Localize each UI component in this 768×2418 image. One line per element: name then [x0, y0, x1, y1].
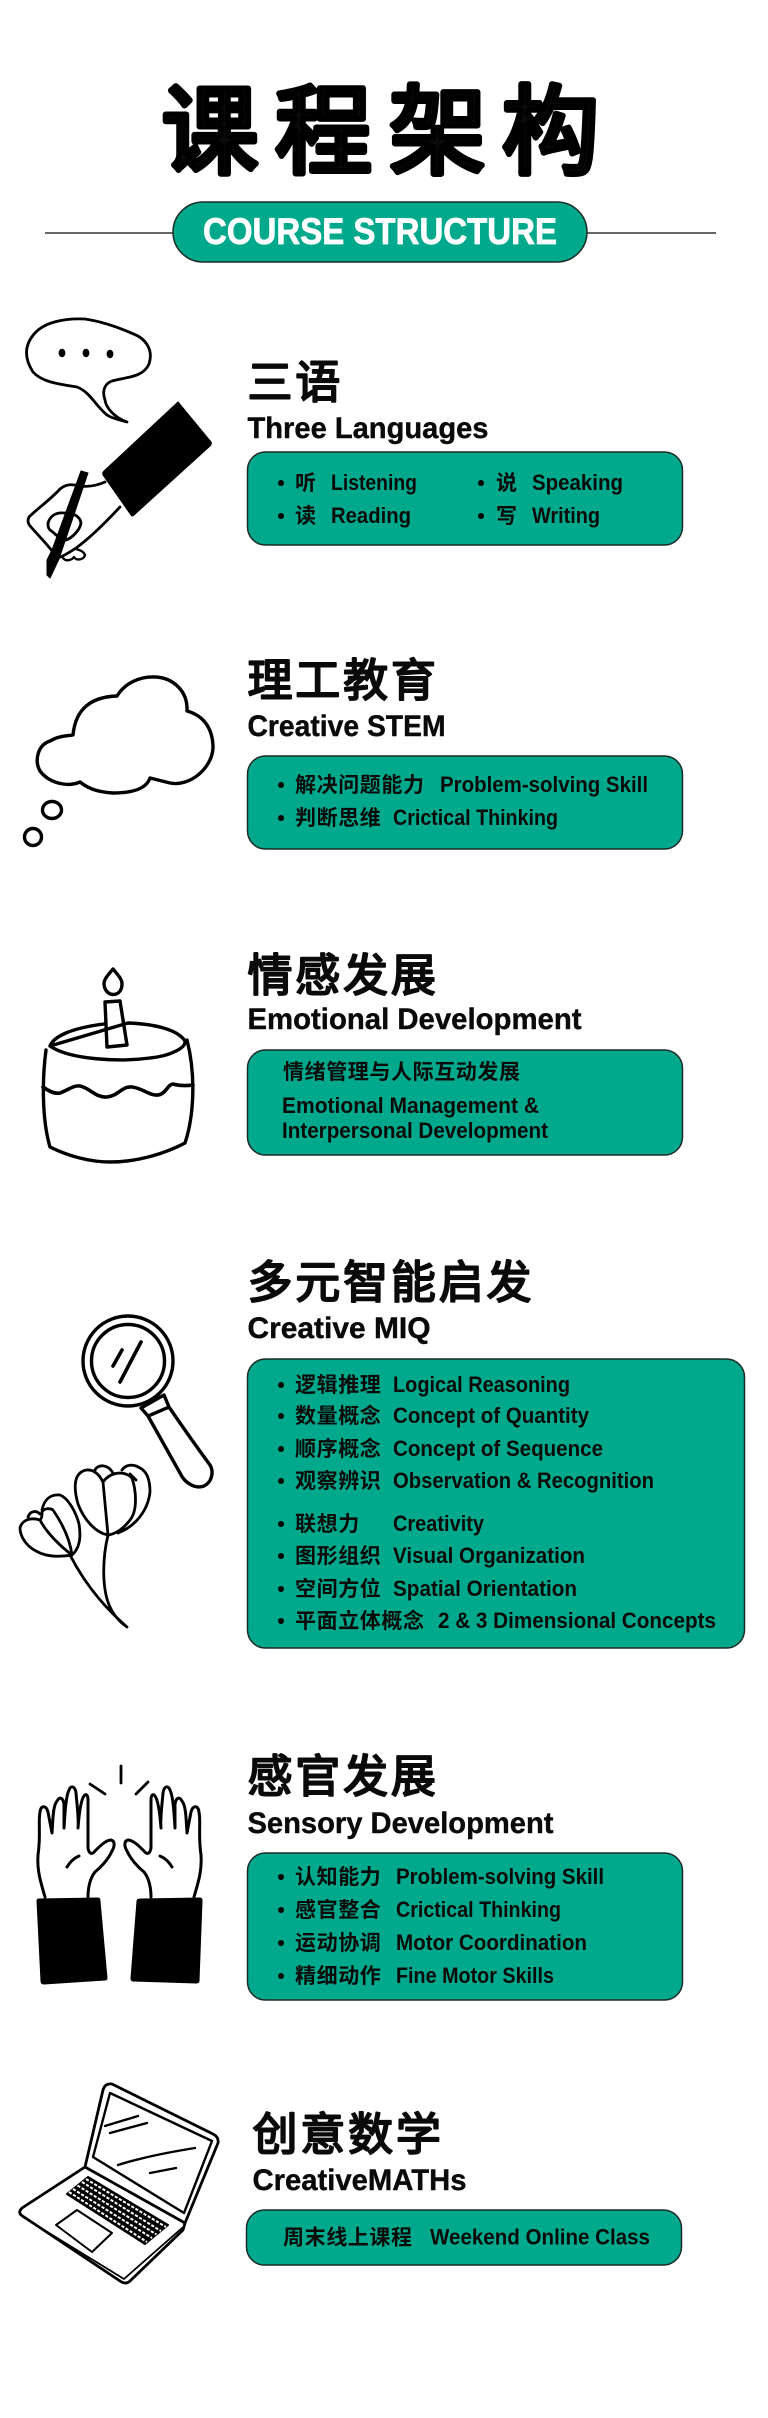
heading: Creative MIQ: Creative MIQ — [248, 1312, 430, 1345]
icon: magnifying glass — [83, 1316, 212, 1487]
section: sensory development — [37, 1751, 682, 2000]
panel: sensory development list: 精细动作 — [295, 1965, 381, 1988]
panel: three languages list: 写 — [496, 505, 518, 528]
panel: creative STEM list: 解决问题能力 — [295, 774, 425, 797]
panel: creative MIQ list: Visual Organization — [393, 1543, 585, 1568]
panel: sensory development list: Crictical Thinking — [396, 1897, 561, 1922]
panel: emotional development text: 情绪管理与人际互动发展 — [283, 1061, 521, 1084]
panel: sensory development list: Problem-solving Skill — [396, 1864, 604, 1889]
panel: creative MIQ list — [248, 1359, 744, 1648]
panel: creative MIQ list: 联想力 — [295, 1513, 360, 1536]
heading: 感官发展: 感官发展 — [248, 1751, 439, 1802]
heading: 情感发展: 情感发展 — [248, 950, 439, 1001]
panel: weekend online class: 周末线上课程 — [283, 2226, 413, 2250]
heading: 多元智能启发: 多元智能启发 — [248, 1257, 534, 1308]
panel: creative MIQ list: Concept of Sequence — [393, 1436, 603, 1461]
section: creative maths — [20, 2084, 681, 2283]
panel: creative MIQ list: 2 & 3 Dimensional Concepts — [438, 1608, 716, 1633]
panel: creative MIQ list: 图形组织 — [295, 1545, 381, 1568]
panel: three languages list: 听 — [295, 472, 317, 495]
panel: creative MIQ list: Concept of Quantity — [393, 1403, 590, 1428]
heading: CreativeMATHs: CreativeMATHs — [252, 2164, 466, 2197]
icon: raised hands — [37, 1766, 202, 1984]
panel: creative MIQ list: 数量概念 — [295, 1404, 381, 1428]
heading: Emotional Development: Emotional Development — [248, 1003, 582, 1036]
panel: sensory development list: Fine Motor Skills — [396, 1963, 554, 1988]
panel: creative MIQ list: Logical Reasoning — [393, 1372, 570, 1397]
panel: creative STEM list — [248, 756, 682, 849]
panel: creative MIQ list: 顺序概念 — [295, 1437, 381, 1461]
heading: 理工教育: 理工教育 — [248, 655, 439, 706]
title: 课程架构 — [162, 78, 599, 187]
section: creative STEM — [24, 655, 682, 849]
panel: three languages list: 读 — [295, 505, 317, 528]
icon: thought cloud — [24, 677, 213, 846]
heading: Sensory Development: Sensory Development — [248, 1807, 554, 1840]
icon: laptop — [20, 2084, 218, 2283]
panel: creative MIQ list: 逻辑推理 — [295, 1374, 381, 1397]
panel: three languages list — [248, 452, 682, 545]
panel: three languages list: Listening — [331, 470, 417, 495]
section: three languages — [26, 319, 683, 578]
panel: three languages list: Speaking — [532, 470, 623, 495]
panel: creative MIQ list: Observation & Recognition — [393, 1468, 654, 1493]
panel: creative MIQ list: 观察辨识 — [295, 1470, 381, 1493]
section: creative MIQ — [20, 1257, 744, 1648]
panel: weekend online class: Weekend Online Class — [430, 2224, 650, 2250]
subtitle pill: course structure — [45, 202, 716, 262]
panel: emotional development text: Interpersonal Development — [282, 1118, 549, 1143]
panel: sensory development list: 运动协调 — [295, 1932, 381, 1955]
panel: creative STEM list: Crictical Thinking — [393, 805, 558, 830]
panel: creative MIQ list: 平面立体概念 — [295, 1609, 425, 1633]
panel: sensory development list: Motor Coordination — [396, 1930, 587, 1955]
panel: creative STEM list: 判断思维 — [295, 807, 381, 830]
section: emotional development — [43, 950, 682, 1162]
panel: sensory development list: 感官整合 — [295, 1898, 381, 1922]
panel: creative MIQ list: Creativity — [393, 1511, 485, 1536]
panel: emotional development text: Emotional Management & — [282, 1093, 539, 1118]
panel: three languages list: Writing — [532, 503, 600, 528]
heading: Three Languages: Three Languages — [248, 412, 488, 445]
panel: creative MIQ list: 空间方位 — [295, 1577, 381, 1601]
panel: creative STEM list: Problem-solving Skill — [440, 772, 648, 797]
icon: cake with candle — [43, 969, 193, 1162]
subtitle pill: course structure: COURSE STRUCTURE — [203, 211, 557, 252]
panel: sensory development list — [248, 1853, 682, 2000]
panel: emotional development text — [248, 1050, 682, 1155]
panel: weekend online class — [246, 2210, 682, 2265]
icon: tulips — [20, 1465, 150, 1627]
heading: Creative STEM: Creative STEM — [248, 710, 446, 743]
panel: creative MIQ list: Spatial Orientation — [393, 1576, 577, 1601]
heading: 创意数学: 创意数学 — [252, 2109, 444, 2160]
panel: three languages list: 说 — [496, 472, 518, 495]
panel: three languages list: Reading — [331, 503, 411, 528]
icon: speech bubble and writing hand — [26, 319, 211, 578]
panel: sensory development list: 认知能力 — [295, 1866, 381, 1889]
heading: 三语: 三语 — [248, 357, 343, 408]
